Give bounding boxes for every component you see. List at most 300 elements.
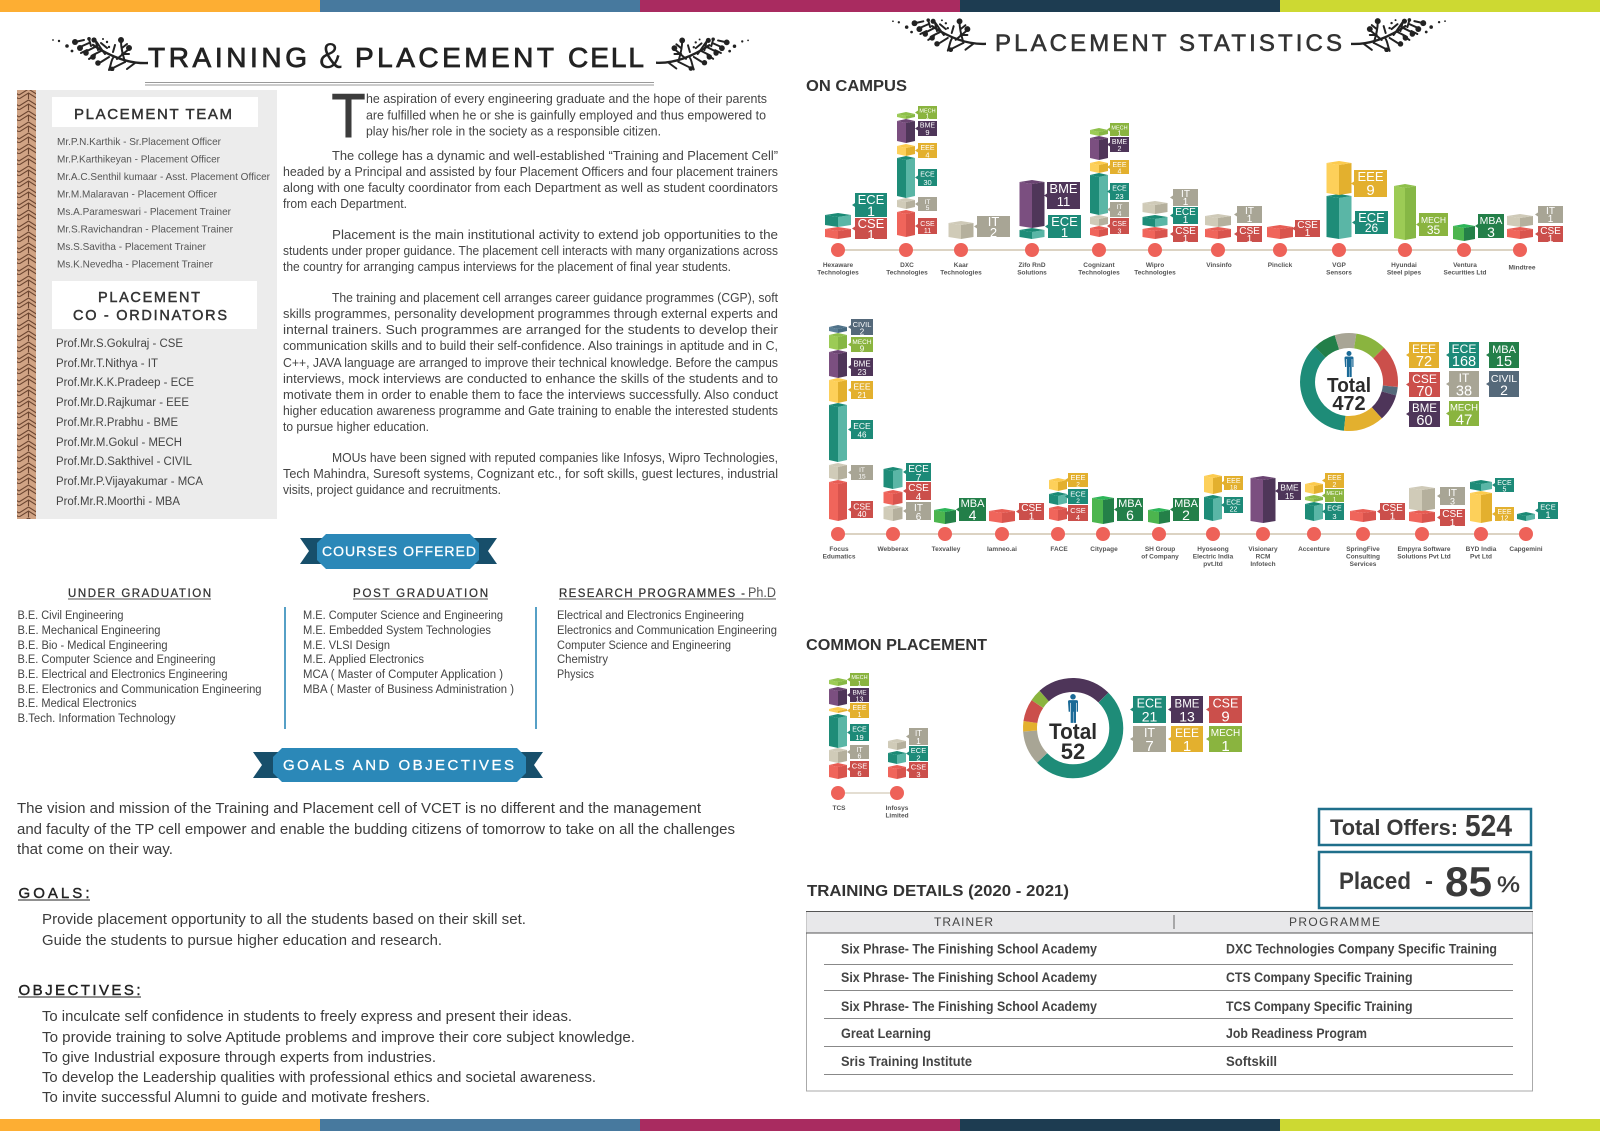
column: under graduation: B.Tech. Information Technology: [18, 713, 176, 725]
heading: placement statistics: PLACEMENT STATISTICS: [995, 30, 1342, 57]
company: Capgemini: 1: [1545, 510, 1551, 520]
company: Wipro Technologies: [1134, 189, 1198, 277]
company: Hyoseong Electric India pvt.ltd: [1193, 474, 1243, 568]
text block: introduction paragraphs: higher education awareness programme and Gate training to enable the interested students: [283, 404, 778, 418]
company: Focus Edumatics: MECH: [852, 339, 872, 346]
company: BYD India Pvt Ltd: ECE: [1497, 480, 1512, 487]
text block: introduction paragraphs: along with one faculty coordinator from each Department as well as student coordinators: [283, 181, 778, 195]
company: Mindtree: 1: [1548, 234, 1554, 245]
table rows: CTS Company Specific Training: [1226, 970, 1412, 985]
list: placement team members: Ms.A.Parameswari - Placement Trainer: [57, 206, 231, 218]
column: research programmes: Computer Science and Engineering: [557, 640, 731, 652]
company: Vinsinfo: IT: [1245, 206, 1254, 217]
company: Focus Edumatics: Edumatics: [823, 554, 856, 561]
company: Zifo RnD Solutions: BME: [1049, 181, 1078, 196]
legend: common placement totals: IT: [1144, 726, 1155, 740]
legend: common placement totals: [1130, 696, 1242, 755]
table header: PROGRAMME: [1289, 915, 1380, 929]
table rows: TCS Company Specific Training: [1226, 999, 1412, 1014]
text block: introduction paragraphs: [283, 82, 779, 497]
company: Focus Edumatics: 21: [858, 391, 867, 400]
company: Focus Edumatics: 46: [858, 430, 867, 440]
legend: common placement totals: ECE: [1137, 696, 1162, 710]
company: Kaar Technologies: Kaar: [954, 262, 969, 269]
company: Vinsinfo: Vinsinfo: [1206, 262, 1232, 269]
legend: on campus totals: 2: [1500, 382, 1508, 398]
company: TCS: 6: [857, 769, 862, 778]
company: Vinsinfo: 1: [1247, 214, 1253, 225]
company: Citypage: [1090, 496, 1143, 553]
company: Cognizant Technologies: 4: [1118, 211, 1122, 218]
legend: on campus totals: 38: [1456, 384, 1472, 400]
column: under graduation: [18, 588, 262, 725]
section: objectives: To inculcate self confidence in students to freely express and present their ideas.: [42, 1009, 572, 1025]
company: Hyundai Steel pipes: 35: [1427, 223, 1440, 237]
company: Cognizant Technologies: IT: [1117, 204, 1122, 211]
company: VGP Sensors: 9: [1366, 182, 1375, 199]
company: DXC Technologies: 1: [926, 114, 930, 120]
company: Kaar Technologies: [940, 214, 1010, 277]
text block: introduction paragraphs: T: [332, 82, 366, 151]
company: SpringFive Consulting Services: SpringFive: [1346, 546, 1380, 553]
company: VGP Sensors: 26: [1365, 221, 1378, 235]
company: Focus Edumatics: 9: [860, 344, 865, 354]
donut chart: on campus total 472: Total: [1327, 375, 1371, 397]
text block: introduction paragraphs: C++, JAVA language are arranged to improve their technical knowledge. Before the campus: [283, 356, 778, 370]
table rows: Job Readiness Program: [1226, 1026, 1367, 1041]
company: Hyoseong Electric India pvt.ltd: Hyoseong: [1197, 546, 1229, 553]
callout: placed percentage: Placed: [1339, 868, 1411, 895]
company: BYD India Pvt Ltd: [1466, 478, 1514, 561]
text block: vision statement: and faculty of the TP cell empower and enable the budding citizens of tomorrow to take on all the challenges: [17, 822, 735, 838]
legend: on campus totals: 168: [1452, 354, 1476, 370]
table: training details: [806, 912, 1533, 1091]
company: Mindtree: [1507, 206, 1563, 272]
company: Hyoseong Electric India pvt.ltd: Electric India: [1193, 554, 1234, 561]
company: Hyoseong Electric India pvt.ltd: ECE: [1226, 500, 1241, 506]
column: post graduation: M.E. VLSI Design: [303, 640, 390, 652]
legend: common placement totals: BME: [1175, 698, 1200, 710]
column: under graduation: B.E. Computer Science and Engineering: [18, 654, 216, 666]
legend: common placement totals: MECH: [1211, 728, 1240, 739]
company: TCS: IT: [856, 747, 863, 754]
text block: introduction paragraphs: motivate them in order to enable them to face the interviews successfully. Also conduct: [283, 388, 779, 402]
company: DXC Technologies: [886, 106, 937, 277]
callout: placed percentage: 85: [1445, 858, 1492, 905]
banner: goals and objectives: GOALS AND OBJECTIVES: [283, 757, 514, 774]
column: research programmes: Ph.D: [748, 584, 776, 600]
company: Ventura Securities Ltd: [1444, 214, 1504, 277]
heading: placement co-ordinators: PLACEMENT: [98, 290, 200, 306]
company: Focus Edumatics: ECE: [853, 421, 871, 431]
company: DXC Technologies: 11: [924, 228, 931, 235]
company: DXC Technologies: MECH: [919, 108, 936, 114]
company: Cognizant Technologies: 4: [1118, 168, 1122, 176]
company: FACE: [1049, 473, 1088, 553]
legend: on campus totals: IT: [1459, 371, 1470, 385]
company: Hexaware Technologies: [817, 192, 887, 277]
column: under graduation: B.E. Electrical and Electronics Engineering: [18, 669, 228, 681]
chart: on campus row 1: [817, 106, 1563, 277]
legend: common placement totals: 1: [1183, 738, 1191, 755]
company: Webberax: [878, 463, 931, 553]
company: VGP Sensors: VGP: [1332, 262, 1347, 269]
company: Texvalley: [932, 498, 986, 553]
text block: introduction paragraphs: interviews, mock interviews are conducted to enhance the skills of the students and to: [283, 372, 778, 386]
company: TCS: [829, 673, 869, 812]
company: Ventura Securities Ltd: MBA: [1480, 215, 1502, 227]
company: DXC Technologies: 5: [926, 205, 930, 212]
company: Cognizant Technologies: Cognizant: [1083, 262, 1116, 269]
company: Focus Edumatics: 2: [860, 328, 865, 336]
company: Empyra Software Solutions Pvt Ltd: Solutions Pvt Ltd: [1397, 554, 1451, 561]
main title: Training and Placement Cell: CELL: [568, 42, 644, 73]
company: Infosys Limited: ECE: [911, 746, 926, 755]
company: Hyundai Steel pipes: Steel pipes: [1387, 270, 1422, 277]
list: placement team members: Ms.K.Nevedha - Placement Trainer: [57, 258, 213, 270]
section: goals: GOALS:: [18, 885, 90, 902]
company: Focus Edumatics: CSE: [853, 502, 871, 512]
text block: vision statement: [17, 801, 735, 858]
company: Kaar Technologies: IT: [988, 214, 999, 229]
legend: on campus totals: 72: [1416, 354, 1432, 370]
column: under graduation: B.E. Bio - Medical Engineering: [18, 640, 168, 652]
legend: common placement totals: CSE: [1213, 696, 1238, 710]
company: TCS: 13: [856, 696, 863, 704]
heading: on campus: ON CAMPUS: [806, 78, 907, 95]
text block: introduction paragraphs: Placement is the main institutional activity to extend job opportunities to the: [332, 228, 778, 242]
legend: on campus totals: MBA: [1492, 344, 1517, 356]
banner: goals and objectives: [253, 748, 543, 782]
text block: introduction paragraphs: are fulfilled when he or she is gainfully employed and thus empowered to: [366, 108, 766, 122]
company: Wipro Technologies: Technologies: [1134, 270, 1176, 277]
company: Pinclick: Pinclick: [1268, 262, 1293, 269]
company: BYD India Pvt Ltd: EEE: [1497, 509, 1512, 516]
company: Citypage: 6: [1126, 507, 1134, 523]
icon: person: [1344, 351, 1354, 377]
column: post graduation: M.E. Embedded System Technologies: [303, 625, 491, 637]
bottom colour bar: [0, 1119, 1600, 1131]
legend: on campus totals: 15: [1496, 354, 1512, 370]
donut chart: on campus total 472: [1308, 341, 1391, 424]
company: TCS: 1: [858, 712, 862, 719]
main title: Training and Placement Cell: [52, 35, 749, 85]
section: goals: [18, 885, 526, 949]
list: department co-ordinators: Prof.Mr.P.Vijayakumar - MCA: [56, 476, 203, 488]
column: under graduation: B.E. Medical Electronics: [18, 698, 137, 710]
donut chart: common placement total 52: [1030, 685, 1116, 771]
list: department co-ordinators: Prof.Mr.R.Moorthi - MBA: [56, 496, 180, 508]
company: TCS: BME: [852, 690, 867, 696]
company: Empyra Software Solutions Pvt Ltd: CSE: [1442, 509, 1463, 520]
top colour bar: [0, 0, 1600, 12]
company: Webberax: 4: [916, 492, 922, 503]
callout: total offers: [1319, 808, 1531, 845]
company: Infosys Limited: 3: [916, 770, 921, 779]
company: Infosys Limited: [885, 728, 928, 820]
company: Wipro Technologies: CSE: [1175, 226, 1196, 237]
main title: Training and Placement Cell: PLACEMENT: [355, 42, 554, 73]
section: goals: Provide placement opportunity to all the students based on their skill set.: [42, 912, 526, 928]
company: FACE: CSE: [1070, 506, 1086, 515]
list: department co-ordinators: Prof.Mr.K.K.Pradeep - ECE: [56, 377, 194, 389]
text block: vision statement: that come on their way.: [17, 842, 173, 858]
column: under graduation: B.E. Civil Engineering: [18, 610, 124, 622]
text block: introduction paragraphs: communication skills and to build their self-confidence. Also trainings in aptitude and in C,: [283, 339, 778, 353]
company: Wipro Technologies: 1: [1183, 215, 1189, 226]
company: FACE: FACE: [1050, 546, 1068, 553]
company: Hexaware Technologies: 1: [867, 227, 875, 242]
company: TCS: CSE: [852, 762, 867, 770]
list: placement team members: Mr.P.N.Karthik - Sr.Placement Officer: [57, 136, 221, 148]
company: Focus Edumatics: CIVIL: [853, 320, 871, 329]
company: Webberax: IT: [914, 503, 923, 514]
company: FACE: 2: [1076, 498, 1080, 505]
company: SH Group of Company: [1141, 498, 1199, 561]
heading: training details: TRAINING DETAILS (2020 - 2021): [807, 883, 1069, 900]
company: Hexaware Technologies: CSE: [858, 216, 885, 231]
legend: on campus totals: 70: [1416, 384, 1433, 400]
company: Vinsinfo: CSE: [1239, 226, 1260, 237]
list: placement team members: [57, 136, 270, 270]
list: department co-ordinators: [56, 338, 203, 508]
column: post graduation: M.E. Computer Science and Engineering: [303, 610, 503, 622]
company: Zifo RnD Solutions: [1017, 180, 1081, 277]
company: Ventura Securities Ltd: Securities Ltd: [1444, 270, 1487, 277]
company: Visionary RCM Infotech: Visionary: [1248, 546, 1278, 553]
company: SpringFive Consulting Services: CSE: [1382, 503, 1403, 514]
company: Empyra Software Solutions Pvt Ltd: [1397, 486, 1465, 561]
company: Cognizant Technologies: 1: [1118, 130, 1122, 138]
company: Cognizant Technologies: MECH: [1111, 126, 1128, 132]
legend: on campus totals: BME: [1412, 403, 1437, 415]
heading: placement co-ordinators: CO - ORDINATORS: [73, 308, 227, 324]
column: research programmes: [536, 584, 777, 729]
company: Vinsinfo: 1: [1247, 234, 1253, 245]
company: Capgemini: [1509, 502, 1558, 553]
text block: introduction paragraphs: students under proper guidance. The placement cell interacts with many organizations across: [283, 244, 778, 258]
company: Webberax: 6: [916, 512, 922, 523]
company: Focus Edumatics: [823, 319, 873, 561]
company: Hexaware Technologies: Technologies: [817, 270, 859, 277]
company: Empyra Software Solutions Pvt Ltd: Empyra Software: [1397, 546, 1451, 553]
callout: placed percentage: [1319, 852, 1531, 908]
text block: introduction paragraphs: to pursue higher education.: [283, 420, 429, 434]
company: Accenture: 3: [1332, 512, 1337, 521]
company: DXC Technologies: Technologies: [886, 270, 928, 277]
column: under graduation: UNDER GRADUATION: [68, 588, 211, 600]
list: placement team members: Mr.S.Ravichandran - Placement Trainer: [57, 224, 233, 236]
table rows: Great Learning: [841, 1026, 931, 1041]
company: Cognizant Technologies: ECE: [1112, 186, 1127, 192]
company: Hyundai Steel pipes: MECH: [1421, 215, 1446, 225]
company: Hyoseong Electric India pvt.ltd: pvt.ltd: [1203, 561, 1223, 568]
company: DXC Technologies: IT: [925, 199, 930, 206]
company: Wipro Technologies: 1: [1183, 234, 1189, 245]
table rows: Six Phrase- The Finishing School Academy: [841, 942, 1097, 956]
company: Accenture: EEE: [1327, 475, 1342, 482]
company: Cognizant Technologies: 3: [1118, 228, 1122, 236]
company: Kaar Technologies: Technologies: [940, 270, 982, 277]
company: Accenture: MECH: [1326, 491, 1343, 497]
company: Infosys Limited: Infosys: [886, 805, 909, 812]
company: TCS: 6: [858, 754, 862, 760]
company: Capgemini: ECE: [1540, 502, 1556, 512]
section: objectives: To give Industrial exposure through experts from industries.: [42, 1050, 436, 1066]
company: Infosys Limited: 1: [916, 737, 921, 746]
company: DXC Technologies: EEE: [920, 145, 935, 152]
text block: introduction paragraphs: the country for arranging campus interviews for the placement of final year students.: [283, 260, 731, 274]
legend: on campus totals: [1406, 342, 1519, 429]
donut chart: on campus total 472: 472: [1332, 393, 1366, 415]
company: Infosys Limited: Limited: [885, 813, 909, 820]
decorative woven strip: [17, 90, 36, 519]
column: post graduation: M.E. Applied Electronics: [303, 654, 424, 666]
chart: on campus row 2: [823, 319, 1558, 568]
list: department co-ordinators: Prof.Mr.D.Sakthivel - CIVIL: [56, 456, 193, 468]
company: Mindtree: Mindtree: [1508, 265, 1536, 272]
legend: on campus totals: CSE: [1412, 372, 1437, 386]
list: department co-ordinators: Prof.Mr.M.Gokul - MECH: [56, 437, 182, 449]
legend: common placement totals: EEE: [1175, 726, 1199, 740]
text block: introduction paragraphs: The college has a dynamic and well-established “Training and Placement Cell”: [332, 149, 778, 163]
legend: common placement totals: 13: [1179, 708, 1195, 724]
company: Empyra Software Solutions Pvt Ltd: IT: [1448, 488, 1457, 499]
company: Webberax: ECE: [908, 464, 929, 475]
text block: introduction paragraphs: he aspiration of every engineering graduate and the hope of their parents: [366, 92, 767, 106]
company: Focus Edumatics: 15: [858, 474, 866, 480]
legend: common placement totals: 9: [1221, 708, 1230, 726]
text block: introduction paragraphs: headed by a Principal and assisted by four Placement Officers and four placement trainers: [283, 165, 778, 179]
company: Zifo RnD Solutions: ECE: [1051, 214, 1078, 229]
company: VGP Sensors: Sensors: [1326, 270, 1352, 277]
company: SpringFive Consulting Services: Services: [1350, 561, 1377, 568]
company: Texvalley: MBA: [961, 498, 985, 510]
company: Cognizant Technologies: [1078, 123, 1129, 277]
section: objectives: [18, 982, 635, 1106]
company: Mindtree: 1: [1548, 214, 1554, 225]
company: Cognizant Technologies: BME: [1112, 139, 1127, 146]
company: Empyra Software Solutions Pvt Ltd: 3: [1450, 496, 1455, 506]
company: Infosys Limited: IT: [915, 729, 922, 738]
company: TCS: 19: [855, 733, 864, 742]
section: objectives: To invite successful Alumni to guide and motivate freshers.: [42, 1090, 430, 1106]
column: research programmes: RESEARCH PROGRAMMES -: [559, 588, 745, 600]
company: Wipro Technologies: 1: [1183, 197, 1189, 208]
legend: common placement totals: 7: [1145, 738, 1154, 755]
heading: placement team: [52, 97, 258, 127]
text block: introduction paragraphs: from each Department.: [283, 197, 407, 211]
company: SH Group of Company: SH Group: [1145, 546, 1175, 553]
legend: on campus totals: MECH: [1450, 402, 1478, 414]
callout: placed percentage: -: [1425, 868, 1433, 895]
company: Empyra Software Solutions Pvt Ltd: 1: [1450, 518, 1456, 529]
legend: on campus totals: EEE: [1412, 342, 1436, 356]
list: placement team members: Mr.M.Malaravan - Placement Officer: [57, 188, 217, 200]
callout: placed percentage: %: [1497, 872, 1520, 897]
table header: [806, 912, 1533, 933]
column: post graduation: MCA ( Master of Computer Application ): [303, 669, 503, 681]
banner: courses offered: [300, 534, 497, 569]
company: VGP Sensors: [1326, 161, 1388, 277]
company: SH Group of Company: MBA: [1174, 498, 1199, 510]
company: Cognizant Technologies: CSE: [1112, 221, 1127, 228]
company: Zifo RnD Solutions: 11: [1057, 194, 1070, 209]
company: VGP Sensors: EEE: [1357, 169, 1384, 184]
company: SpringFive Consulting Services: [1346, 503, 1405, 568]
company: BYD India Pvt Ltd: Pvt Ltd: [1470, 554, 1492, 561]
chart: common placement companies: [829, 673, 928, 820]
company: DXC Technologies: ECE: [920, 172, 935, 178]
company: Accenture: Accenture: [1298, 546, 1330, 553]
company: DXC Technologies: CSE: [920, 221, 935, 228]
legend: on campus totals: 47: [1456, 412, 1472, 428]
company: TCS: MECH: [851, 675, 868, 681]
company: Texvalley: Texvalley: [932, 546, 961, 553]
company: Visionary RCM Infotech: RCM: [1256, 554, 1270, 561]
company: SpringFive Consulting Services: Consulting: [1346, 554, 1380, 561]
text block: introduction paragraphs: MOUs have been signed with reputed companies like Infosys, Wipro Technologies,: [332, 451, 778, 465]
text block: introduction paragraphs: internal trainers. Such programmes are arranged for the students to develop their: [283, 323, 778, 337]
table rows: Sris Training Institute: [841, 1054, 972, 1069]
legend: on campus totals: CIVIL: [1491, 373, 1517, 385]
company: Cognizant Technologies: EEE: [1112, 162, 1127, 169]
company: Ventura Securities Ltd: 3: [1487, 224, 1495, 240]
company: Hyundai Steel pipes: Hyundai: [1391, 262, 1417, 269]
company: TCS: ECE: [852, 726, 867, 734]
company: SH Group of Company: of Company: [1141, 554, 1179, 561]
company: Iamneo.ai: Iamneo.ai: [987, 546, 1017, 553]
company: Accenture: 2: [1333, 482, 1337, 489]
table header: TRAINER: [934, 915, 993, 929]
table rows: Softskill: [1226, 1054, 1277, 1069]
legend: on campus totals: 60: [1416, 413, 1433, 429]
company: Cognizant Technologies: Technologies: [1078, 270, 1120, 277]
company: FACE: 2: [1076, 482, 1080, 488]
table rows: Six Phrase- The Finishing School Academy: [841, 970, 1097, 985]
company: Hyoseong Electric India pvt.ltd: EEE: [1226, 478, 1241, 485]
company: DXC Technologies: 4: [925, 150, 930, 160]
company: SpringFive Consulting Services: 1: [1390, 512, 1396, 522]
section: goals: Guide the students to pursue higher education and research.: [42, 933, 442, 949]
section: objectives: OBJECTIVES:: [18, 982, 140, 999]
heading: placement statistics: [892, 18, 1446, 57]
company: Citypage: MBA: [1118, 498, 1143, 510]
company: SH Group of Company: 2: [1182, 507, 1190, 523]
column: research programmes: Electronics and Communication Engineering: [557, 625, 777, 637]
company: Kaar Technologies: 2: [990, 225, 997, 240]
company: Pinclick: [1267, 220, 1320, 269]
company: Texvalley: 4: [969, 507, 977, 523]
section: objectives: To develop the Leadership qualities with professional ethics and societal awareness.: [42, 1070, 596, 1086]
column: research programmes: Electrical and Electronics Engineering: [557, 610, 744, 622]
company: FACE: EEE: [1070, 473, 1086, 482]
company: Infosys Limited: CSE: [911, 762, 926, 772]
company: Focus Edumatics: Focus: [829, 546, 849, 553]
company: TCS: EEE: [852, 705, 867, 712]
company: DXC Technologies: 9: [925, 128, 930, 137]
list: department co-ordinators: Prof.Mr.D.Rajkumar - EEE: [56, 397, 189, 409]
company: Capgemini: Capgemini: [1509, 546, 1543, 553]
company: Infosys Limited: 2: [916, 754, 921, 762]
main title: Training and Placement Cell: &: [319, 35, 342, 76]
donut chart: common placement total 52: 52: [1061, 739, 1085, 764]
company: Vinsinfo: [1205, 206, 1262, 269]
company: Focus Edumatics: EEE: [853, 382, 871, 392]
icon: person: [1068, 694, 1078, 723]
column: research programmes: Physics: [557, 669, 594, 681]
company: Webberax: Webberax: [878, 546, 909, 553]
